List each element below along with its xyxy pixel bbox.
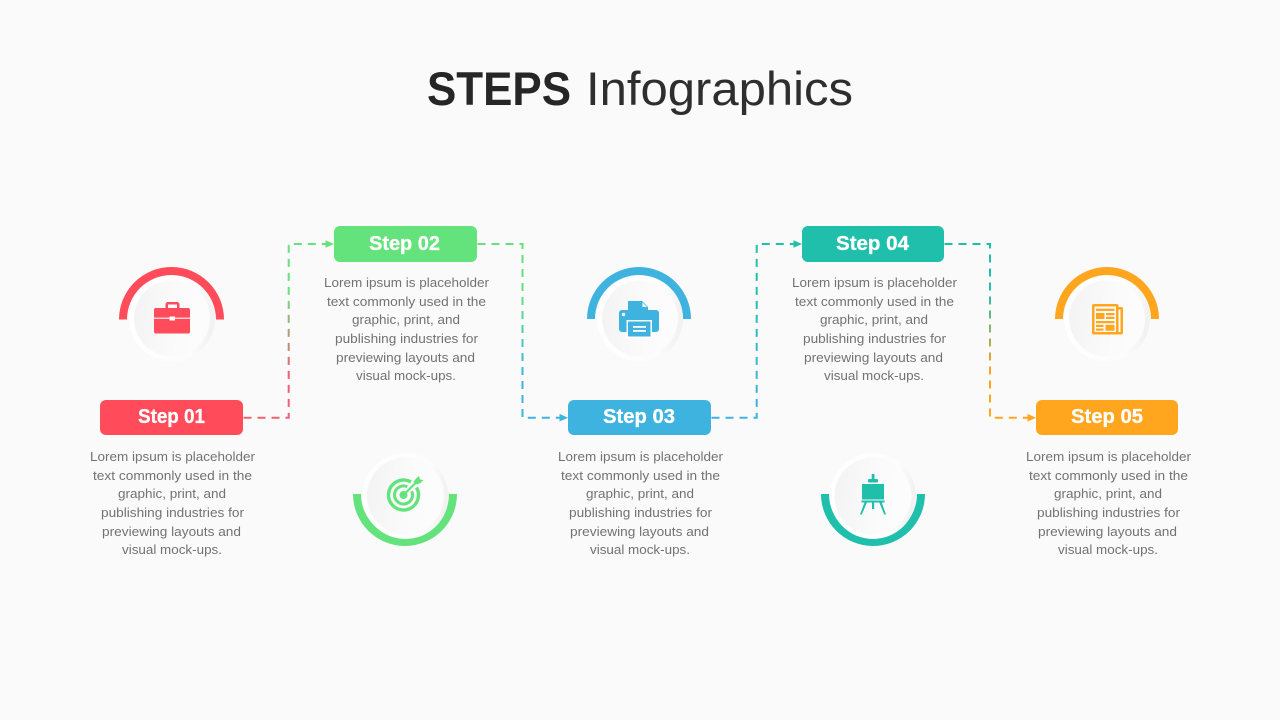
step 05 text: visual mock-ups. <box>1058 543 1158 557</box>
step 03 text <box>558 450 723 557</box>
step 04 ring <box>821 494 925 546</box>
step 04 label: Step 04 <box>836 232 910 255</box>
step 01 text: text commonly used in the <box>93 469 252 483</box>
step 04 text <box>792 276 957 383</box>
step 03 text: previewing layouts and <box>570 525 709 539</box>
step 02 text: graphic, print, and <box>352 313 460 327</box>
step 01 text: graphic, print, and <box>118 487 226 501</box>
icon: easel <box>860 474 886 514</box>
step 04 text: visual mock-ups. <box>824 369 924 383</box>
step 05 label <box>1036 400 1178 435</box>
step 02 text <box>324 276 489 383</box>
step 01 disc <box>129 276 215 362</box>
step 02 text: previewing layouts and <box>336 351 475 365</box>
panel: step 02 <box>324 226 489 546</box>
step 05 disc <box>1064 276 1150 362</box>
panel: step 05 <box>1026 267 1191 557</box>
step 01 text: publishing industries for <box>101 506 244 520</box>
step 03 text: Lorem ipsum is placeholder <box>558 450 723 464</box>
step 02 text: text commonly used in the <box>327 295 486 309</box>
step 04 disc <box>830 453 916 539</box>
step 04 text: text commonly used in the <box>795 295 954 309</box>
step 02 disc <box>362 453 448 539</box>
step 03 text: visual mock-ups. <box>590 543 690 557</box>
panel: step 01 <box>90 267 255 557</box>
step 04 text: Lorem ipsum is placeholder <box>792 276 957 290</box>
step 03 text: text commonly used in the <box>561 469 720 483</box>
icon: printer <box>619 301 659 338</box>
step 02 label <box>334 226 477 262</box>
step 04 text: previewing layouts and <box>804 351 943 365</box>
step 01 text: Lorem ipsum is placeholder <box>90 450 255 464</box>
step 05 text <box>1026 450 1191 557</box>
step 02 ring <box>353 494 457 546</box>
step 01 ring <box>119 267 224 320</box>
step 05 text: text commonly used in the <box>1029 469 1188 483</box>
step 04 label <box>802 226 944 262</box>
title <box>427 62 853 115</box>
step 01 label: Step 01 <box>138 405 205 428</box>
title: STEPS <box>427 62 571 115</box>
arrow: step 04 to step 05 <box>944 244 1036 422</box>
step 01 label <box>100 400 243 435</box>
title: Infographics <box>586 62 853 115</box>
arrow: step 02 to step 03 <box>478 244 568 422</box>
step 03 text: graphic, print, and <box>586 487 694 501</box>
panel: step 03 <box>558 267 723 557</box>
icon: newspaper <box>1092 304 1123 334</box>
step 03 label: Step 03 <box>603 405 675 428</box>
step 01 text: previewing layouts and <box>102 525 241 539</box>
step 05 text: graphic, print, and <box>1054 487 1162 501</box>
step 05 text: previewing layouts and <box>1038 525 1177 539</box>
icon: target <box>389 476 424 510</box>
step 04 text: publishing industries for <box>803 332 946 346</box>
step 03 label <box>568 400 711 435</box>
step 03 disc <box>597 276 683 362</box>
step 02 text: publishing industries for <box>335 332 478 346</box>
step 02 text: visual mock-ups. <box>356 369 456 383</box>
step 05 text: Lorem ipsum is placeholder <box>1026 450 1191 464</box>
panel: step 04 <box>792 226 957 546</box>
step 03 ring <box>587 267 691 319</box>
step 01 text: visual mock-ups. <box>122 543 222 557</box>
step 05 label: Step 05 <box>1071 405 1143 428</box>
arrow: step 03 to step 04 <box>712 240 802 418</box>
step 04 text: graphic, print, and <box>820 313 928 327</box>
arrow: step 01 to step 02 <box>244 240 334 418</box>
icon: briefcase <box>154 302 190 334</box>
step 01 text <box>90 450 255 557</box>
step 03 text: publishing industries for <box>569 506 712 520</box>
step 02 label: Step 02 <box>369 232 440 255</box>
step 02 text: Lorem ipsum is placeholder <box>324 276 489 290</box>
step 05 text: publishing industries for <box>1037 506 1180 520</box>
step 05 ring <box>1055 267 1159 319</box>
